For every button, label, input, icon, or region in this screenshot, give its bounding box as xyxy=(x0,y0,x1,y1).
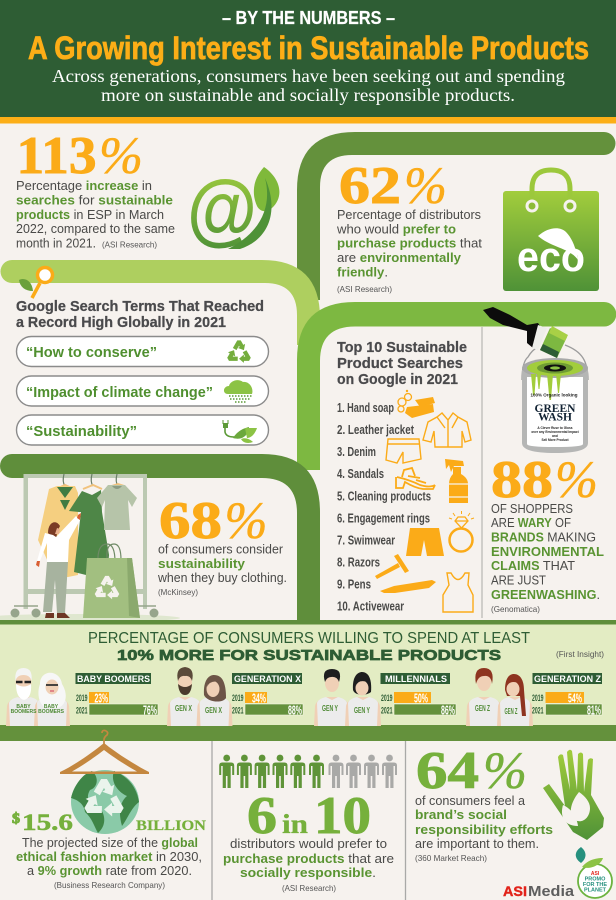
label text: 100% Organic looking xyxy=(530,392,578,398)
stat: 64 percent: brand’s social xyxy=(415,807,507,822)
stat: 64 percent xyxy=(415,742,553,863)
stat: 62 percent xyxy=(336,157,482,294)
chart: baby boomers: BABY BOOMERS xyxy=(77,674,150,685)
panel: top 10 searches: 10. Activewear xyxy=(337,600,404,614)
rack frame xyxy=(24,474,147,609)
people: generation z xyxy=(466,668,533,726)
people: baby boomers: BOOMERS xyxy=(11,709,37,715)
hangers xyxy=(63,474,118,486)
chart: millennials: 86% xyxy=(441,704,455,718)
chart: baby boomers: 76% xyxy=(143,704,157,718)
stat: 6 in 10: in xyxy=(282,809,308,839)
header banner xyxy=(0,0,616,124)
chart: generation z: 54% xyxy=(568,692,582,706)
illustration: greenwash paint can and brush: WASH xyxy=(538,412,572,424)
people: baby boomers xyxy=(6,668,70,726)
icon: plug and leaves xyxy=(223,420,257,443)
stat: 15.6 billion: 15.6 xyxy=(22,810,73,835)
stat: 88 percent greenwashing: 88 xyxy=(491,451,553,509)
chart: generation z: 2019 xyxy=(532,693,544,703)
stat: 6 in 10: (ASI Research) xyxy=(282,883,336,893)
panel: generations spending: 10% MORE FOR SUSTAINABLE PRODUCTS xyxy=(117,647,501,664)
illustration: greenwash paint can and brush: Sell More Product xyxy=(541,438,569,442)
chart: generation z: 81% xyxy=(587,704,601,718)
chart: generation x: GENERATION X xyxy=(234,674,302,685)
shopping bag xyxy=(98,544,121,563)
heading: google search terms: Google Search Terms That Reached xyxy=(16,298,264,315)
chart: baby boomers: 2019 xyxy=(76,693,88,703)
curved band: bright green xyxy=(297,302,616,470)
stat: 62 percent: are environmentally xyxy=(337,250,462,265)
stat: 88 percent greenwashing: ENVIRONMENTAL xyxy=(491,544,604,559)
stat: 88 percent greenwashing: BRANDS MAKING xyxy=(491,530,596,544)
stat: 88 percent greenwashing xyxy=(491,451,604,614)
stat: 113 percent: 2022, compared to the same xyxy=(16,221,175,236)
search term pill: impact of climate change: “Impact of climate change” xyxy=(26,384,213,401)
chart: millennials xyxy=(380,673,456,718)
stat: 64 percent: responsibility efforts xyxy=(415,822,553,837)
subtitle xyxy=(52,66,565,105)
stat: 62 percent: 62 xyxy=(339,157,401,215)
stat: 113 percent: month in 2021. xyxy=(16,236,96,250)
illustration: greenwash paint can and brush: A Clever Ruse to Gloss xyxy=(537,426,573,430)
panel: top 10 searches xyxy=(337,339,467,614)
stat: 88 percent greenwashing: (Genomatica) xyxy=(491,604,540,614)
illustration: greenwash paint can and brush: GREEN xyxy=(535,403,576,415)
stat: 15.6 billion: $ xyxy=(12,811,21,827)
illustration: globe on a hanger xyxy=(60,730,149,834)
chart: generation z xyxy=(532,673,602,718)
dress xyxy=(69,490,109,575)
stat: 15.6 billion xyxy=(12,810,206,890)
icon: denim shorts xyxy=(386,439,421,463)
curved band: light green xyxy=(0,260,320,345)
icons: orange product icons xyxy=(375,390,474,612)
stat: 64 percent: % xyxy=(483,743,527,800)
search term pill: sustainability xyxy=(16,415,268,445)
search term pill: how to conserve xyxy=(16,336,268,366)
panel: top 10 searches: 8. Razors xyxy=(337,556,380,570)
coat xyxy=(38,486,78,577)
chart: baby boomers: 23% xyxy=(94,692,108,706)
stat: 68 percent: when they buy clothing. xyxy=(157,570,287,585)
subtitle: Across generations, consumers have been seeking out and spending xyxy=(52,66,565,86)
curved band: top dark green xyxy=(297,132,616,300)
chart: baby boomers xyxy=(76,673,158,718)
stat: 15.6 billion: a 9% growth rate from 2020. xyxy=(27,863,192,878)
search term pill: sustainability: “Sustainability” xyxy=(26,423,137,440)
chart: generation x: 34% xyxy=(252,692,266,706)
heading: PERCENTAGE OF CONSUMERS WILLING TO SPEND AT LEAST xyxy=(88,630,530,647)
logo: promo for the planet badge: PROMO xyxy=(585,876,606,882)
stat: 6 in 10: distributors would prefer to xyxy=(230,836,387,851)
stat: 62 percent: purchase products that xyxy=(337,236,482,250)
curved band: dark green lower xyxy=(0,454,320,620)
stat: 64 percent: are important to them. xyxy=(415,836,539,851)
panel: top 10 searches: 2. Leather jacket xyxy=(337,423,415,437)
icon: leather jacket xyxy=(423,413,471,447)
shopper xyxy=(48,522,60,544)
panel: top 10 searches: Product Searches xyxy=(337,355,463,372)
people: generation z: GEN Z xyxy=(504,707,518,716)
stat: 64 percent: of consumers feel a xyxy=(415,793,526,808)
logo: promo for the planet badge xyxy=(576,847,612,898)
icon: eco shopping bag xyxy=(503,170,599,291)
stat: 113 percent: Percentage increase in xyxy=(16,178,152,193)
chart: millennials: MILLENNIALS xyxy=(385,674,447,685)
stat: 62 percent: friendly. xyxy=(337,264,388,280)
stat: 88 percent greenwashing: CLAIMS THAT xyxy=(491,558,575,573)
people: baby boomers: BOOMERS xyxy=(38,709,65,715)
people: generation x: GEN X xyxy=(175,703,192,713)
chart: baby boomers: 2021 xyxy=(76,706,88,716)
stat: 64 percent: (360 Market Reach) xyxy=(415,853,487,863)
logo: promo for the planet badge: FOR THE xyxy=(583,882,607,888)
icon: recycle xyxy=(225,340,253,365)
people: generation x xyxy=(167,667,232,726)
logo: ASI Media xyxy=(503,883,575,900)
search term pill: how to conserve: “How to conserve” xyxy=(26,344,157,361)
stat: 6 in 10 xyxy=(223,787,394,893)
can body xyxy=(522,370,588,453)
icon: eco shopping bag: eco xyxy=(517,233,585,280)
stat: 113 percent: products in ESP in March xyxy=(16,207,164,222)
stat: 62 percent: (ASI Research) xyxy=(337,284,392,294)
logo: ASI Media: Media xyxy=(528,883,575,900)
icon: swim shorts xyxy=(406,528,444,556)
panel: generations spending: (First Insight) xyxy=(556,649,604,659)
stat: 6 in 10: 10 xyxy=(314,787,371,845)
people: generation z: GEN Z xyxy=(475,703,490,713)
stat: 62 percent: % xyxy=(404,158,447,215)
icon: tank top xyxy=(443,573,473,612)
search term pill: impact of climate change xyxy=(16,376,268,406)
panel: top 10 searches: Top 10 Sustainable xyxy=(337,339,467,356)
stat: 113 percent xyxy=(16,127,175,250)
chart: millennials: 50% xyxy=(414,692,428,706)
people: baby boomers: BABY xyxy=(44,704,59,710)
panel: generations spending xyxy=(0,620,616,741)
panel: top 10 searches: 5. Cleaning products xyxy=(337,490,431,504)
stat: 113 percent: searches for sustainable xyxy=(16,192,173,208)
icon: hand with leaf xyxy=(543,750,604,840)
stat: 88 percent greenwashing: GREENWASHING. xyxy=(491,587,600,602)
chart: generation x: 2021 xyxy=(232,706,244,716)
logo: ASI Media: ASI xyxy=(503,883,527,899)
chart: millennials: 2019 xyxy=(381,693,392,703)
people: millennials xyxy=(314,669,381,726)
panel: top 10 searches: 6. Engagement rings xyxy=(337,512,430,526)
stat: 6 in 10: 6 xyxy=(247,787,277,845)
illustration: clothing rack and shopper xyxy=(0,474,180,622)
stat: 88 percent greenwashing: % xyxy=(555,452,598,509)
stat: 88 percent greenwashing: ARE WARY OF xyxy=(491,515,571,530)
panel: top 10 searches: 1. Hand soap xyxy=(337,401,394,415)
stat: 15.6 billion: The projected size of the global xyxy=(22,835,198,850)
chart: generation x: 88% xyxy=(288,704,302,718)
stat: 62 percent: who would prefer to xyxy=(336,222,456,236)
panel: top 10 searches: on Google in 2021 xyxy=(337,371,458,388)
people: millennials: GEN Y xyxy=(354,706,370,715)
logo: promo for the planet badge: PLANET xyxy=(584,888,607,894)
panel: top 10 searches: 7. Swimwear xyxy=(337,534,395,548)
chart: generation x: 2019 xyxy=(232,693,244,703)
chart: generation x xyxy=(232,673,303,718)
kicker: by the numbers: – BY THE NUMBERS – xyxy=(222,8,395,28)
icon: pen xyxy=(380,580,436,593)
icon: at sign with leaf: @ xyxy=(187,164,257,253)
paint drips xyxy=(531,374,561,400)
stat: 113 percent: 113 xyxy=(16,127,96,185)
icon: sandal xyxy=(396,468,435,489)
panel: top 10 searches: 4. Sandals xyxy=(337,467,384,481)
divider xyxy=(212,741,406,900)
stat: 113 percent: % xyxy=(99,128,143,185)
subtitle: more on sustainable and socially responsible products. xyxy=(101,85,515,105)
divider xyxy=(481,327,483,618)
stat: 68 percent: of consumers consider xyxy=(158,542,284,556)
stat: 68 percent: (McKinsey) xyxy=(158,587,198,597)
illustration: greenwash paint can and brush xyxy=(483,307,588,453)
icon: diamond ring xyxy=(449,511,474,552)
illustration: greenwash paint can and brush: and xyxy=(552,434,558,438)
icon: ten people, six highlighted xyxy=(219,755,397,788)
stat: 113 percent: (ASI Research) xyxy=(102,240,157,250)
stat: 68 percent: 68 xyxy=(159,492,222,550)
heading: google search terms: a Record High Globally in 2021 xyxy=(16,314,226,331)
stat: 15.6 billion: BILLION xyxy=(136,818,206,834)
panel: top 10 searches: 9. Pens xyxy=(337,578,371,592)
icon: spray bottle xyxy=(445,459,468,503)
people: millennials: GEN Y xyxy=(322,703,338,713)
stat: 62 percent: Percentage of distributors xyxy=(337,207,481,222)
heading: google search terms xyxy=(16,298,264,331)
t-shirt xyxy=(97,485,137,530)
stat: 68 percent: % xyxy=(224,493,268,550)
panel: top 10 searches: 3. Denim xyxy=(337,445,376,459)
icon: hands and soap xyxy=(398,390,435,418)
chart: generation z: GENERATION Z xyxy=(534,674,601,685)
chart: millennials: 2021 xyxy=(381,706,392,716)
chart: generation z: 2021 xyxy=(532,706,544,716)
stat: 15.6 billion: (Business Research Company) xyxy=(54,880,165,890)
people: generation x: GEN X xyxy=(205,706,222,715)
icon: razor xyxy=(375,554,409,579)
illustration: greenwash paint can and brush: over any Environmental Impact xyxy=(531,430,580,434)
people: baby boomers: BABY xyxy=(16,704,31,710)
stat: 15.6 billion: ethical fashion market in 2030, xyxy=(16,849,202,864)
stat: 6 in 10: purchase products that are xyxy=(223,851,394,866)
brush xyxy=(483,307,543,348)
stat: 68 percent: sustainability xyxy=(158,556,246,571)
stat: 64 percent: 64 xyxy=(416,742,479,800)
logo: promo for the planet badge: ASI xyxy=(591,871,600,877)
stat: 6 in 10: socially responsible . xyxy=(240,865,376,880)
icon: magnifying glass with leaf xyxy=(19,268,52,298)
stat: 88 percent greenwashing: OF SHOPPERS xyxy=(491,501,573,516)
can handle xyxy=(522,345,588,380)
stat: 68 percent xyxy=(157,492,287,597)
icon: rain cloud xyxy=(224,380,252,402)
stat: 88 percent greenwashing: ARE JUST xyxy=(491,572,546,588)
